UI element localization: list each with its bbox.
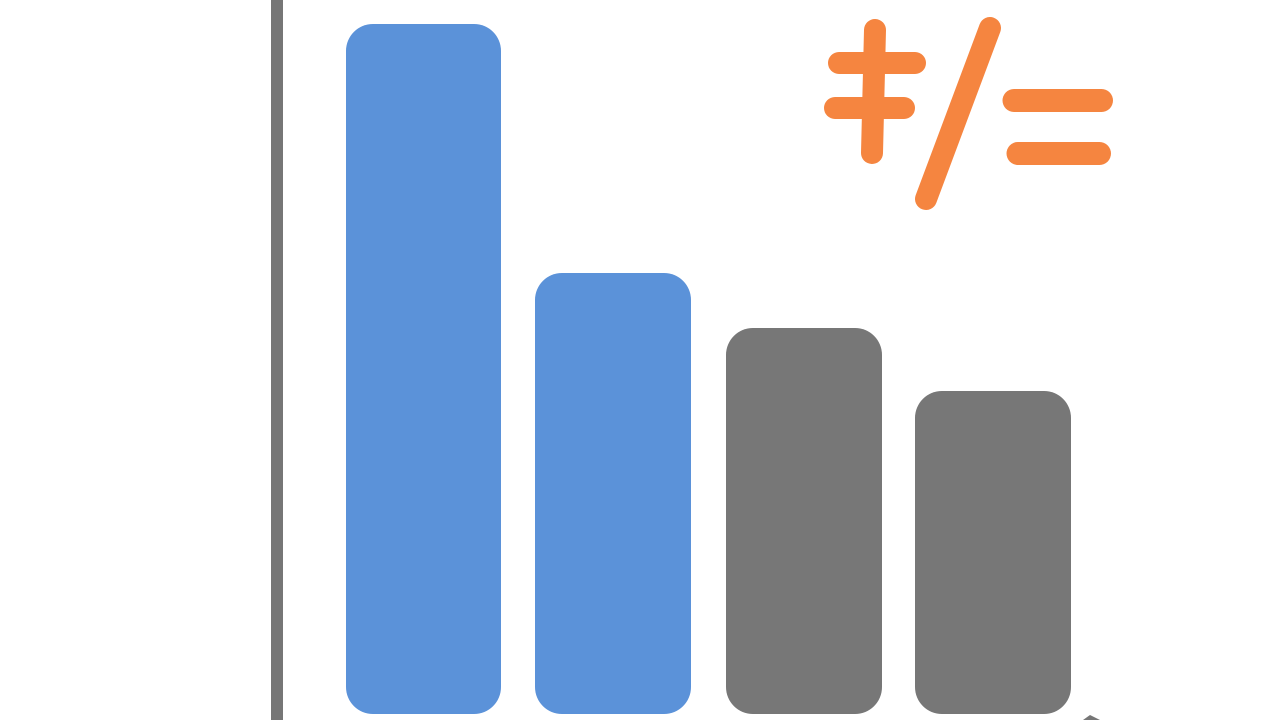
chart y axis xyxy=(271,0,283,720)
bar chart xyxy=(346,24,1071,714)
bar 3: gray xyxy=(726,328,882,714)
symbol: slash xyxy=(926,28,990,199)
symbol: equals bars xyxy=(1014,100,1102,154)
bar 1: blue, tallest xyxy=(346,24,501,714)
icon: orange not-equal symbol xyxy=(835,28,1102,199)
bar 2: blue xyxy=(535,273,691,714)
x axis arrow tip, cropped at the bottom edge xyxy=(1083,715,1100,720)
symbol: double-crossed vertical stroke xyxy=(835,30,915,153)
bar 4: gray, shortest xyxy=(915,391,1071,714)
